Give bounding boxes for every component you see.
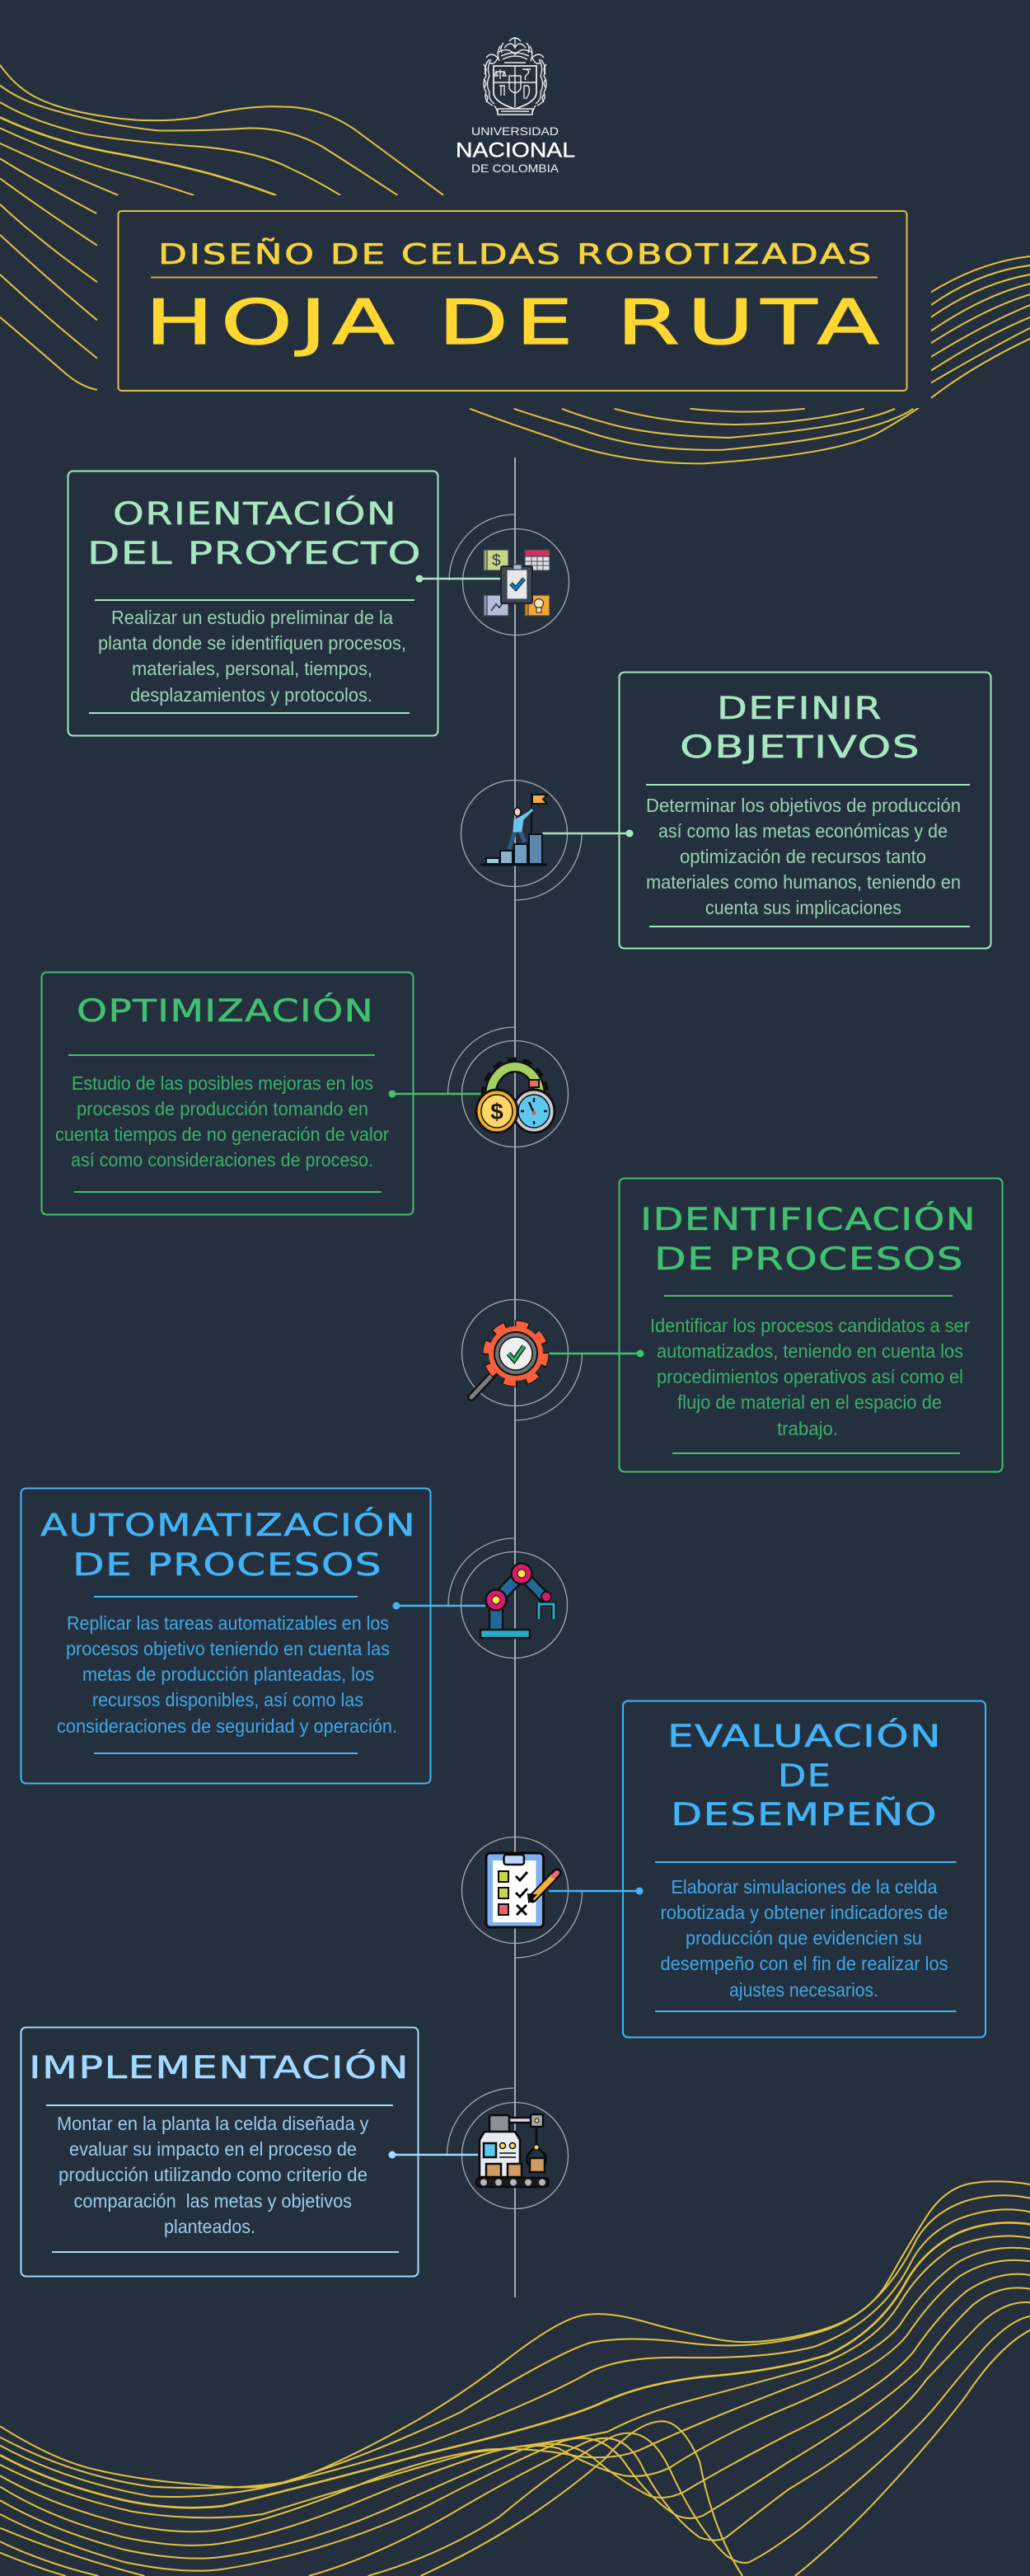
step 5 heading — [40, 1507, 416, 1583]
icon: checklist clipboard and pencil — [486, 1853, 557, 1927]
step 4 rings — [461, 1299, 582, 1420]
step 5 text: recursos disponibles, así como las — [92, 1689, 363, 1710]
step 4 text — [650, 1315, 970, 1439]
step 6 heading: EVALUACIÓN — [667, 1718, 942, 1754]
step 1 heading: ORIENTACIÓN — [113, 495, 397, 532]
logo text: nacional: NACIONAL — [456, 138, 575, 162]
step 4 text: procedimientos operativos así como el — [657, 1366, 963, 1387]
step 2 text: materiales como humanos, teniendo en — [646, 871, 961, 893]
step 2 text — [646, 795, 961, 918]
step 5 text: Replicar las tareas automatizables en los — [67, 1612, 389, 1634]
step 2 rings — [461, 780, 582, 900]
step 6 panel: evaluación — [623, 1701, 986, 2038]
step 2 connector — [542, 829, 633, 838]
crest — [484, 37, 546, 115]
step 1 text: Realizar un estudio preliminar de la — [111, 607, 393, 628]
step 1 rings — [449, 514, 569, 635]
step 7 heading: IMPLEMENTACIÓN — [29, 2049, 410, 2086]
step 1 panel: orientación — [68, 472, 438, 735]
step 4 heading — [640, 1201, 976, 1277]
step 5 text: metas de producción planteadas, los — [82, 1663, 374, 1685]
step 2 heading: OBJETIVOS — [680, 730, 920, 765]
step 7 panel: implementación — [21, 2028, 419, 2277]
decorative waves: top left — [0, 65, 443, 390]
step 6 text: producción que evidencien su — [686, 1927, 922, 1949]
step 6 text — [661, 1876, 948, 2001]
step 7 text — [57, 2113, 369, 2237]
step 6 connector — [549, 1888, 643, 1894]
main title: HOJA DE RUTA — [145, 286, 887, 359]
step 5 heading: AUTOMATIZACIÓN — [40, 1507, 416, 1543]
step 3 text: Estudio de las posibles mejoras en los — [72, 1072, 373, 1094]
step 5 connector — [392, 1602, 485, 1609]
step 1 text: desplazamientos y protocolos. — [130, 684, 372, 706]
step 6 heading: DE — [778, 1758, 831, 1794]
step 7 connector — [389, 2151, 478, 2158]
step 1 text: materiales, personal, tiempos, — [132, 658, 372, 679]
step 1 text: planta donde se identifiquen procesos, — [98, 632, 406, 654]
step 2 panel: definir objetivos — [620, 673, 990, 948]
step 4 text: automatizados, teniendo en cuenta los — [657, 1340, 963, 1362]
step 2 text: así como las metas económicas y de — [658, 820, 948, 842]
step 3 text — [55, 1072, 389, 1171]
step 6 heading: DESEMPEÑO — [671, 1796, 938, 1832]
step 7 rings — [447, 2088, 569, 2209]
step 3 text: procesos de producción tomando en — [77, 1098, 368, 1119]
step 1 heading: DEL PROYECTO — [87, 536, 422, 571]
step 2 text: optimización de recursos tanto — [680, 846, 926, 867]
step 4 text: flujo de material en el espacio de — [677, 1391, 942, 1413]
step 3 text: así como consideraciones de proceso. — [71, 1149, 373, 1171]
step 4 panel: identificación — [620, 1179, 1002, 1472]
step 4 text: trabajo. — [777, 1418, 838, 1439]
step 5 text: consideraciones de seguridad y operación. — [57, 1715, 397, 1737]
step 2 text: cuenta sus implicaciones — [705, 897, 901, 918]
step 4 heading: IDENTIFICACIÓN — [640, 1201, 976, 1237]
icon: planning clipboard with notes: $ — [492, 552, 501, 570]
step 4 heading: DE PROCESOS — [654, 1241, 964, 1277]
icon: coin and stopwatch with gear — [476, 1061, 555, 1133]
step 5 heading: DE PROCESOS — [73, 1547, 382, 1583]
logo text: de colombia: DE COLOMBIA — [471, 162, 559, 175]
step 1 connector — [415, 575, 501, 582]
step 6 text: ajustes necesarios. — [729, 1979, 878, 2001]
decorative waves: top right — [470, 256, 1030, 463]
step 6 text: desempeño con el fin de realizar los — [661, 1953, 948, 1974]
step 7 text: planteados. — [164, 2216, 255, 2237]
step 5 panel: automatización — [21, 1489, 430, 1784]
icon: planning clipboard with notes — [484, 550, 550, 616]
step 6 heading — [667, 1718, 942, 1832]
step 7 text: producción utilizando como criterio de — [59, 2164, 368, 2185]
decorative waves: bottom — [0, 2181, 1030, 2576]
subtitle: DISEÑO DE CELDAS ROBOTIZADAS — [158, 238, 873, 271]
university logo — [456, 37, 575, 175]
step 2 heading — [680, 691, 920, 765]
step 3 heading: OPTIMIZACIÓN — [77, 992, 374, 1029]
step 2 text: Determinar los objetivos de producción — [646, 795, 961, 816]
step 4 text: Identificar los procesos candidatos a ser — [650, 1315, 970, 1336]
step 3 text: cuenta tiempos de no generación de valor — [55, 1124, 389, 1145]
step 4 connector — [549, 1350, 644, 1357]
timeline axis — [514, 457, 516, 2297]
step 1 text — [98, 607, 406, 706]
step 6 text: Elaborar simulaciones de la celda — [671, 1876, 938, 1898]
step 3 rings — [448, 1027, 569, 1147]
icon: person on stairs with flag — [480, 793, 547, 865]
step 5 text: procesos objetivo teniendo en cuenta las — [66, 1638, 390, 1659]
step 1 heading — [87, 495, 422, 571]
step 7 text: evaluar su impacto en el proceso de — [69, 2138, 357, 2160]
icon: automated production line — [476, 2114, 549, 2187]
step 5 text — [57, 1612, 397, 1737]
step 3 connector — [389, 1090, 483, 1098]
step 6 text: robotizada y obtener indicadores de — [661, 1902, 948, 1923]
step 7 text: comparación las metas y objetivos — [74, 2190, 352, 2212]
icon: gear with magnifier and check — [471, 1325, 545, 1397]
logo text: universidad: UNIVERSIDAD — [471, 124, 559, 138]
title panel — [119, 211, 906, 391]
icon: robot arm — [480, 1563, 554, 1638]
step 7 text: Montar en la planta la celda diseñada y — [57, 2113, 369, 2134]
step 3 panel: optimización — [41, 973, 414, 1215]
step 5 rings — [448, 1538, 567, 1659]
step 6 rings — [461, 1837, 582, 1958]
step 2 heading: DEFINIR — [717, 691, 883, 726]
icon: coin and stopwatch with gear: $ — [490, 1099, 503, 1124]
